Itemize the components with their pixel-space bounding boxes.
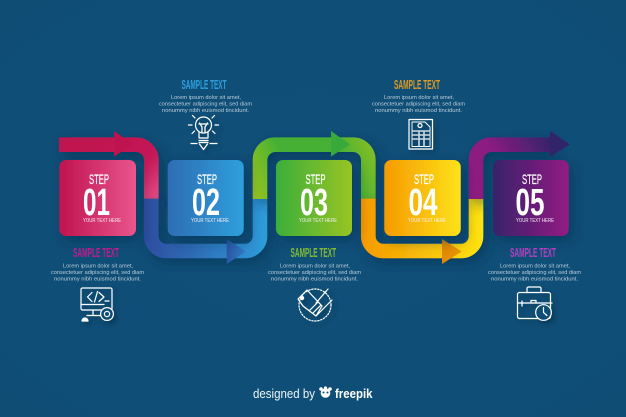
- heading: SAMPLE TEXT: [182, 78, 227, 92]
- body: Lorem ipsum dolor sit amet,: [171, 95, 241, 101]
- text block: step 4: consectetuer adipiscing elit, sed diam: [372, 102, 465, 108]
- card box: [168, 160, 244, 236]
- icon: handshake: [298, 289, 332, 321]
- step number: 05: [516, 182, 544, 224]
- heading: SAMPLE TEXT: [394, 78, 440, 92]
- arrow 5: [550, 131, 570, 156]
- caption: YOUR TEXT HERE: [299, 218, 337, 224]
- ribbon segment: orange: [368, 199, 476, 251]
- caption: YOUR TEXT HERE: [516, 218, 554, 224]
- text block: step 1: nonummy nibh euismod tincidunt.: [54, 276, 141, 282]
- arrow 3: [331, 131, 350, 156]
- heading: SAMPLE TEXT: [73, 246, 119, 260]
- step number: 03: [300, 182, 328, 224]
- step label: STEP: [414, 171, 434, 187]
- text block: step 4: nonummy nibh euismod tincidunt.: [375, 108, 462, 114]
- card box: [59, 160, 136, 236]
- icon: light bulb: [188, 116, 218, 150]
- step number: 04: [408, 182, 438, 224]
- step number: 01: [83, 182, 110, 224]
- step number: 02: [192, 182, 220, 224]
- text block: step 5: [488, 246, 581, 282]
- icon: freepik logo: [319, 386, 332, 398]
- card box: [384, 160, 461, 236]
- body: Lorem ipsum dolor sit amet,: [500, 264, 570, 270]
- ribbon segment: blue: [151, 199, 260, 251]
- text block: step 1: consectetuer adipiscing elit, sed diam: [51, 270, 144, 276]
- text block: step 3: consectetuer adipiscing elit, sed diam: [268, 270, 361, 276]
- heading: SAMPLE TEXT: [291, 246, 336, 260]
- text block: step 4: [372, 78, 465, 114]
- body: Lorem ipsum dolor sit amet,: [63, 264, 133, 270]
- text block: step 1: [51, 246, 144, 282]
- ribbon segment: purple: [476, 145, 552, 199]
- text block: step 5: nonummy nibh euismod tincidunt.: [491, 276, 578, 282]
- card box: [276, 160, 352, 236]
- text block: step 2: nonummy nibh euismod tincidunt.: [162, 108, 249, 114]
- heading: SAMPLE TEXT: [510, 246, 556, 260]
- step card 05: [493, 160, 569, 236]
- text block: step 3: [268, 246, 361, 282]
- caption: YOUR TEXT HERE: [83, 218, 121, 224]
- ribbon segment: green: [260, 145, 368, 199]
- arrow 2: [227, 239, 246, 264]
- body: Lorem ipsum dolor sit amet,: [384, 95, 454, 101]
- step label: STEP: [306, 171, 326, 187]
- text block: step 3: nonummy nibh euismod tincidunt.: [271, 276, 358, 282]
- ribbon segment: red: [59, 145, 151, 199]
- arrow heads: [114, 131, 570, 264]
- arrow 4: [442, 239, 462, 264]
- arrow 1: [114, 131, 134, 156]
- text block: step 5: consectetuer adipiscing elit, sed diam: [488, 270, 581, 276]
- step card 02: [168, 160, 244, 236]
- text block: step 2: consectetuer adipiscing elit, sed diam: [159, 102, 252, 108]
- footer credit: [253, 386, 373, 401]
- step label: STEP: [522, 171, 542, 187]
- flow ribbon: [59, 145, 552, 251]
- step label: STEP: [197, 171, 217, 187]
- step card 03: [276, 160, 352, 236]
- card box: [493, 160, 569, 236]
- body: Lorem ipsum dolor sit amet,: [280, 264, 350, 270]
- step card 04: [384, 160, 461, 236]
- text block: step 2: [159, 78, 252, 114]
- step label: STEP: [89, 171, 109, 187]
- caption: YOUR TEXT HERE: [191, 218, 229, 224]
- designed by: designed by: [253, 386, 315, 401]
- freepik wordmark: freepik: [335, 386, 373, 401]
- caption: YOUR TEXT HERE: [408, 218, 446, 224]
- icon: briefcase with clock: [518, 287, 552, 320]
- icon: document with table: [409, 120, 432, 149]
- icon: code monitor: [81, 288, 113, 321]
- step card 01: [59, 160, 136, 236]
